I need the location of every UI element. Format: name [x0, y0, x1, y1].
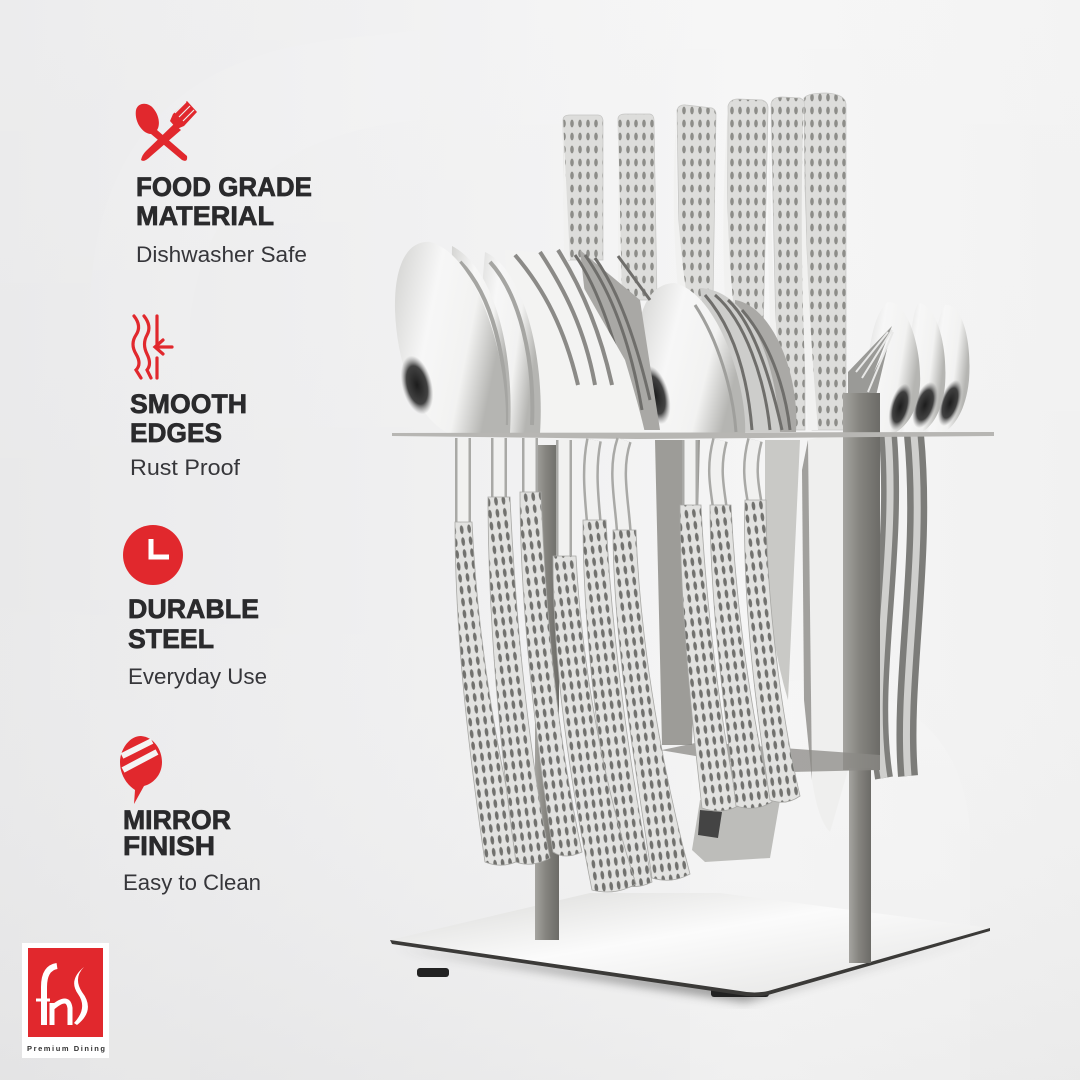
- necks of hanging cutlery: [463, 438, 755, 560]
- heading: FINISH: [123, 831, 215, 861]
- icon: crossed spoon and fork: [136, 101, 197, 161]
- glass shelf top: [392, 432, 994, 439]
- feature: durable steel: [123, 525, 267, 689]
- icon: wavy edges with arrow: [133, 316, 172, 378]
- front stand post: [843, 393, 880, 963]
- icon: spoon head with stripes: [120, 736, 162, 804]
- spoon and fork heads: left group: [395, 242, 660, 436]
- heading: EDGES: [130, 418, 222, 448]
- right spoons and forks hanging handles: [879, 435, 917, 778]
- heading: [136, 172, 312, 231]
- heading: DURABLE: [128, 594, 259, 624]
- back knives: [655, 440, 800, 862]
- stand base: [390, 893, 990, 1002]
- icon: clock: [123, 525, 183, 585]
- logo: FnS Premium Dining: [22, 943, 109, 1058]
- heading: STEEL: [128, 624, 214, 654]
- logo: FnS Premium Dining: Premium Dining: [27, 1044, 105, 1053]
- heading: MATERIAL: [136, 201, 274, 231]
- feature: food grade material: [136, 101, 312, 267]
- subtext: Everyday Use: [128, 664, 267, 689]
- heading: FOOD GRADE: [136, 172, 312, 202]
- spoon and fork heads: middle group: [634, 283, 796, 436]
- subtext: Rust Proof: [130, 455, 241, 480]
- product: cutlery stand: [390, 93, 994, 1002]
- subtext: Dishwasher Safe: [136, 242, 307, 267]
- heading: MIRROR: [123, 805, 231, 835]
- hanging hammered handles: [455, 492, 800, 892]
- subtext: Easy to Clean: [123, 870, 261, 895]
- spoon and fork heads: right group: [848, 302, 970, 433]
- feature: mirror finish: [120, 736, 261, 895]
- heading: [123, 805, 231, 861]
- heading: [128, 594, 259, 654]
- heading: [130, 389, 247, 448]
- lower shelf: [660, 742, 880, 772]
- knife blades front: [802, 430, 848, 832]
- heading: SMOOTH: [130, 389, 247, 419]
- back stand post: [535, 445, 559, 940]
- feature: smooth edges: [130, 316, 247, 480]
- upright knife handles: [563, 93, 846, 430]
